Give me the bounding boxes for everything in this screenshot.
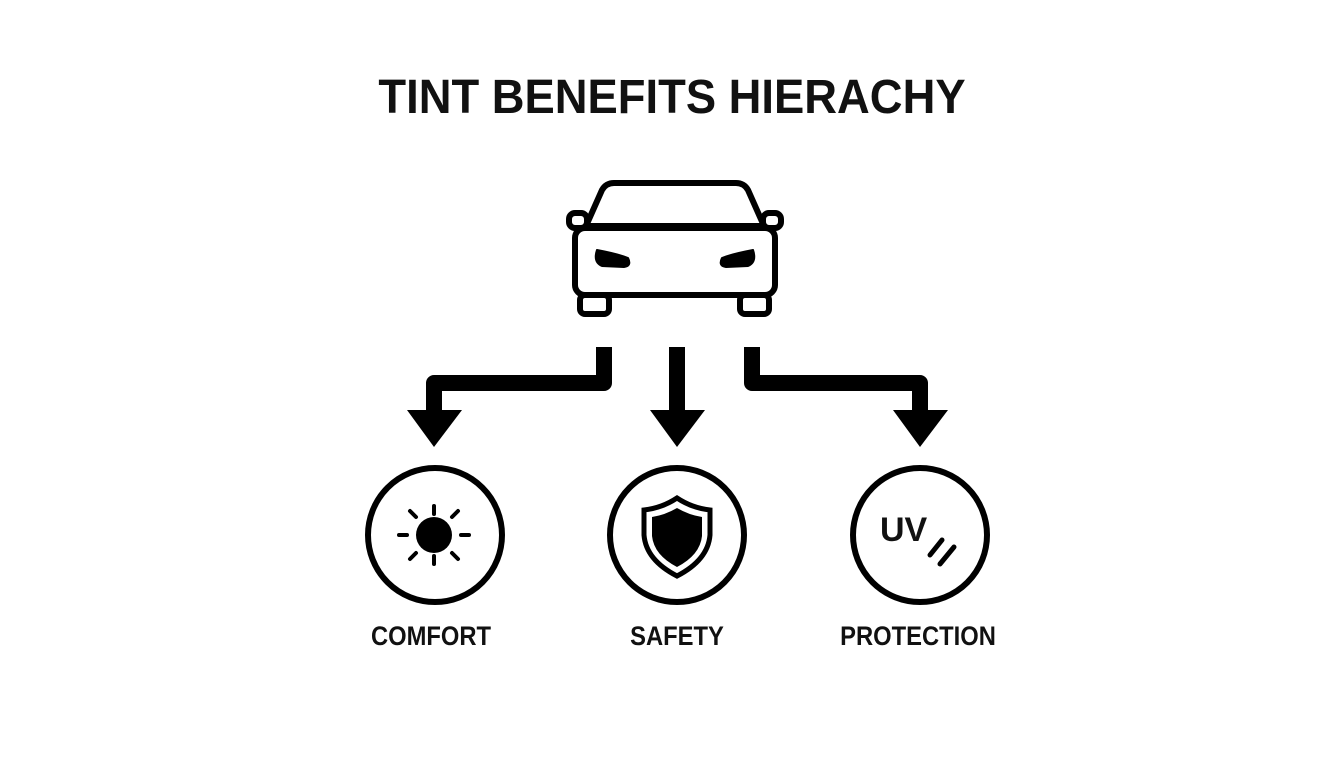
icon: UV	[853, 468, 987, 602]
icon: shield	[610, 468, 744, 602]
arrow: middle	[650, 347, 705, 447]
icon: sun	[368, 468, 502, 602]
label: protection: PROTECTION	[840, 621, 996, 651]
label: comfort: COMFORT	[371, 621, 491, 651]
icon: UV: UV	[880, 511, 928, 549]
label: safety: SAFETY	[630, 621, 724, 651]
icon: car	[569, 183, 781, 314]
arrow: left	[407, 347, 604, 447]
title: TINT BENEFITS HIERACHY	[378, 71, 966, 124]
arrow: right	[752, 347, 948, 447]
